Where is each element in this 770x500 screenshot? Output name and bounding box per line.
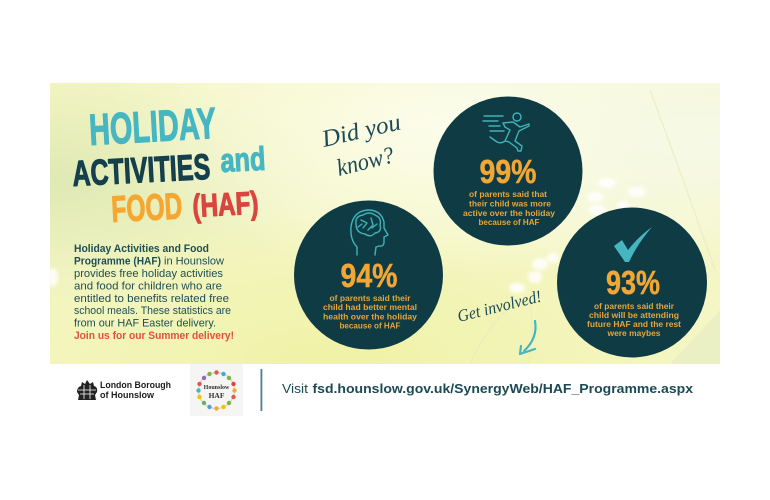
- text block: programme description: from our HAF Easter delivery.: [74, 318, 216, 330]
- divider: [260, 369, 262, 411]
- badge text: Hounslow: [204, 385, 230, 391]
- handwritten note: Did you know?: Did you: [318, 110, 403, 153]
- title line: HOLIDAY: HOLIDAY: [88, 99, 217, 155]
- caption: 94%: because of HAF: [340, 320, 400, 330]
- icon: borough crest: [77, 380, 97, 400]
- badge text: [204, 385, 230, 400]
- logo text: London Borough: [100, 380, 171, 390]
- website link text: Visit: [282, 381, 308, 396]
- text block: programme description: [74, 243, 234, 342]
- stat circle: 99% more active: [434, 96, 582, 246]
- caption: 99%: because of HAF: [478, 217, 540, 227]
- caption: 94%: child had better mental: [323, 302, 417, 312]
- title line: ACTIVITIES: ACTIVITIES: [71, 146, 211, 194]
- website link text: fsd.hounslow.gov.uk/SynergyWeb/HAF_Programme.aspx: [312, 381, 694, 396]
- arrow: pointing to website: [520, 321, 536, 354]
- stat value: 99%: 99%: [480, 153, 536, 190]
- caption: 93%: child will be attending: [589, 310, 679, 320]
- title word: (HAF): (HAF): [191, 185, 259, 224]
- caption: 94%: [323, 293, 417, 330]
- title word: FOOD: FOOD: [110, 185, 183, 230]
- text block: programme description: Join us for our Summer delivery!: [74, 330, 234, 342]
- badge text: HAF: [209, 391, 225, 400]
- icon: check mark: [614, 227, 652, 262]
- icon: head with brain: [351, 210, 388, 255]
- caption: 94%: health over the holiday: [323, 312, 417, 322]
- caption: 93%: future HAF and the rest: [587, 319, 681, 329]
- caption: 99%: active over the holiday: [463, 208, 555, 218]
- panel: yellow-green meadow background: [48, 83, 720, 364]
- handwritten note: Get involved!: Get involved!: [455, 287, 543, 326]
- caption: 99%: of parents said that: [469, 189, 547, 199]
- caption: 93%: of parents said their: [594, 301, 675, 311]
- stat value: 94%: 94%: [340, 257, 398, 294]
- logo text: [100, 380, 171, 400]
- text block: programme description: in Hounslow: [164, 256, 225, 268]
- handwritten note: Did you know?: [318, 110, 403, 182]
- title word: and: and: [219, 140, 266, 179]
- text block: programme description: provides free holiday activities: [74, 268, 223, 280]
- stat circle: 94% mental health: [294, 200, 443, 350]
- caption: 99%: their child was more: [469, 198, 551, 208]
- caption: 94%: of parents said their: [330, 293, 411, 303]
- logo: London Borough of Hounslow: [77, 380, 171, 400]
- stat value: 93%: 93%: [606, 264, 660, 301]
- logo: Hounslow HAF badge: [190, 364, 243, 416]
- caption: 99%: [463, 189, 555, 227]
- handwritten note: Did you know?: know?: [334, 143, 397, 182]
- stat circle: 93% attending future HAF: [557, 208, 707, 358]
- text block: programme description: school meals. These statistics are: [74, 305, 231, 317]
- icon: running figure: [483, 113, 529, 151]
- text block: programme description: and food for children who are: [74, 280, 222, 292]
- text block: programme description: Programme (HAF): [74, 256, 161, 268]
- title: Holiday Activities and Food (HAF): [71, 99, 266, 230]
- caption: 93%: [587, 301, 681, 338]
- caption: 93%: were maybes: [607, 328, 661, 338]
- text block: programme description: entitled to benefits related free: [74, 293, 229, 305]
- logo text: of Hounslow: [100, 390, 155, 400]
- icon: ring of coloured dots: [196, 370, 237, 411]
- text block: programme description: Holiday Activities and Food: [74, 243, 209, 255]
